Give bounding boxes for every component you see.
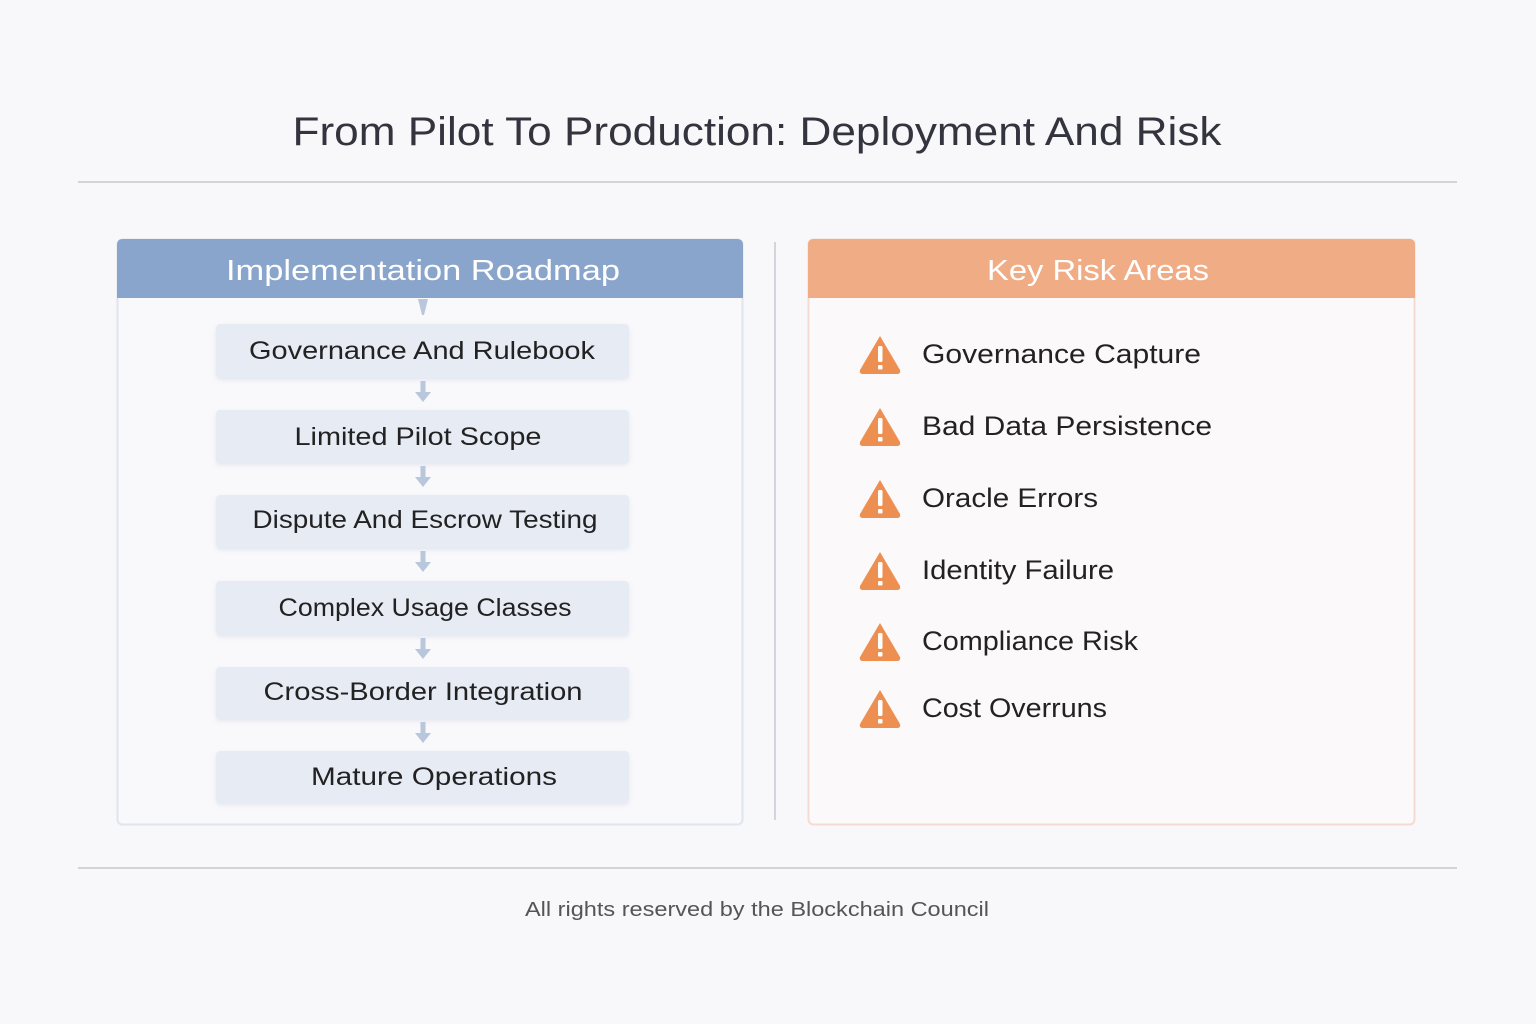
step 1 xyxy=(216,324,629,378)
risk: governance capture xyxy=(860,336,1201,374)
step 4: Complex Usage Classes xyxy=(278,594,572,622)
panel: implementation roadmap xyxy=(117,239,743,824)
risk: bad data persistence: Bad Data Persistence xyxy=(922,411,1212,441)
step 5: Cross-Border Integration xyxy=(264,678,582,706)
step 2: Limited Pilot Scope xyxy=(294,423,542,451)
risk: compliance risk: Compliance Risk xyxy=(922,626,1139,656)
step 3: Dispute And Escrow Testing xyxy=(252,506,598,534)
risk: oracle errors xyxy=(860,480,1098,518)
step 1: Governance And Rulebook xyxy=(249,337,596,365)
step 2 xyxy=(216,410,629,463)
risk: identity failure xyxy=(860,552,1114,590)
step 6: Mature Operations xyxy=(311,763,557,791)
title: From Pilot To Production: Deployment And Risk xyxy=(292,110,1223,154)
panel: key risk areas xyxy=(808,239,1415,824)
risk: oracle errors: Oracle Errors xyxy=(922,483,1098,513)
risk: compliance risk xyxy=(860,623,1139,661)
roadmap header xyxy=(117,239,743,298)
step 4 xyxy=(216,581,629,635)
risk header xyxy=(808,239,1415,298)
step 5 xyxy=(216,667,629,719)
risk: bad data persistence xyxy=(860,408,1212,446)
risk: cost overruns xyxy=(860,690,1107,728)
step 6 xyxy=(216,751,629,803)
step 3 xyxy=(216,495,629,548)
risk header: Key Risk Areas xyxy=(987,255,1209,287)
risk: cost overruns: Cost Overruns xyxy=(922,693,1107,723)
risk: governance capture: Governance Capture xyxy=(922,339,1201,369)
roadmap header: Implementation Roadmap xyxy=(226,255,620,287)
footer: All rights reserved by the Blockchain Council xyxy=(525,899,989,921)
risk: identity failure: Identity Failure xyxy=(922,555,1114,585)
